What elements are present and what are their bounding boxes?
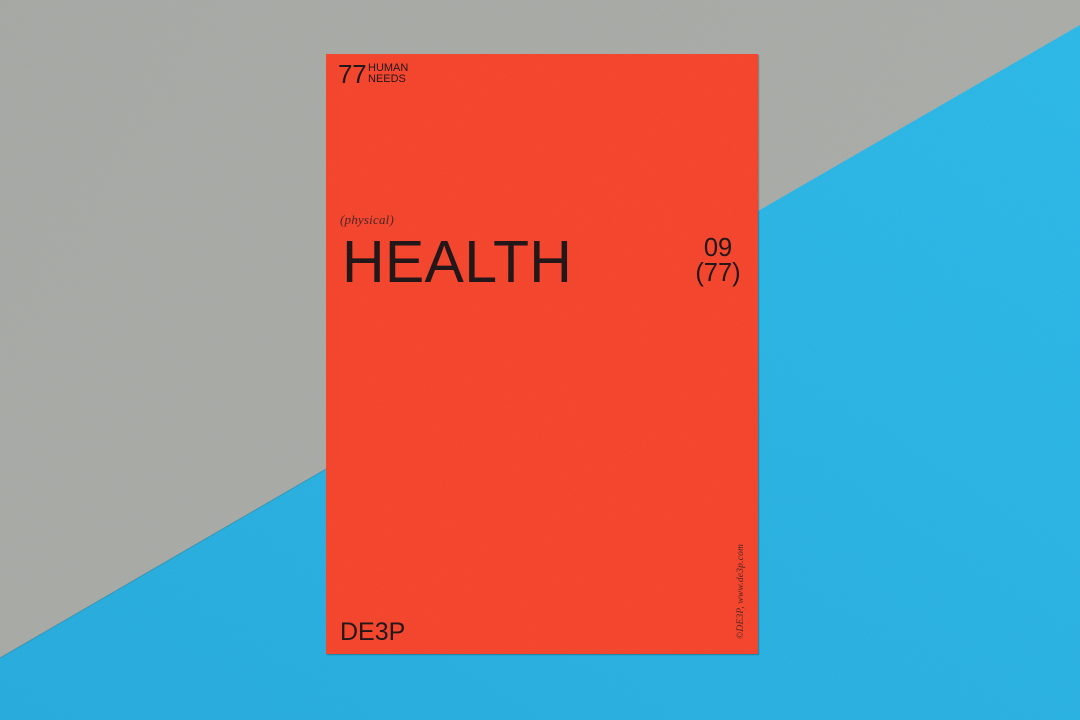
issue number: 09 of 77 bbox=[695, 234, 741, 287]
subtitle: physical: (physical) bbox=[340, 212, 394, 227]
series number 77: 77 bbox=[338, 59, 366, 89]
series name: human needs: HUMAN bbox=[368, 62, 408, 74]
panel: red poster card bbox=[326, 54, 758, 654]
copyright: vertical credit: ©DE3P, www.de3p.com bbox=[736, 544, 746, 639]
brand: de3p: DE3P bbox=[340, 618, 405, 646]
series name: human needs bbox=[368, 62, 408, 85]
issue number: 09 of 77: (77) bbox=[695, 259, 741, 287]
series name: human needs: NEEDS bbox=[368, 73, 406, 85]
issue number: 09 of 77: 09 bbox=[704, 234, 732, 262]
title: health: HEALTH bbox=[342, 229, 572, 295]
